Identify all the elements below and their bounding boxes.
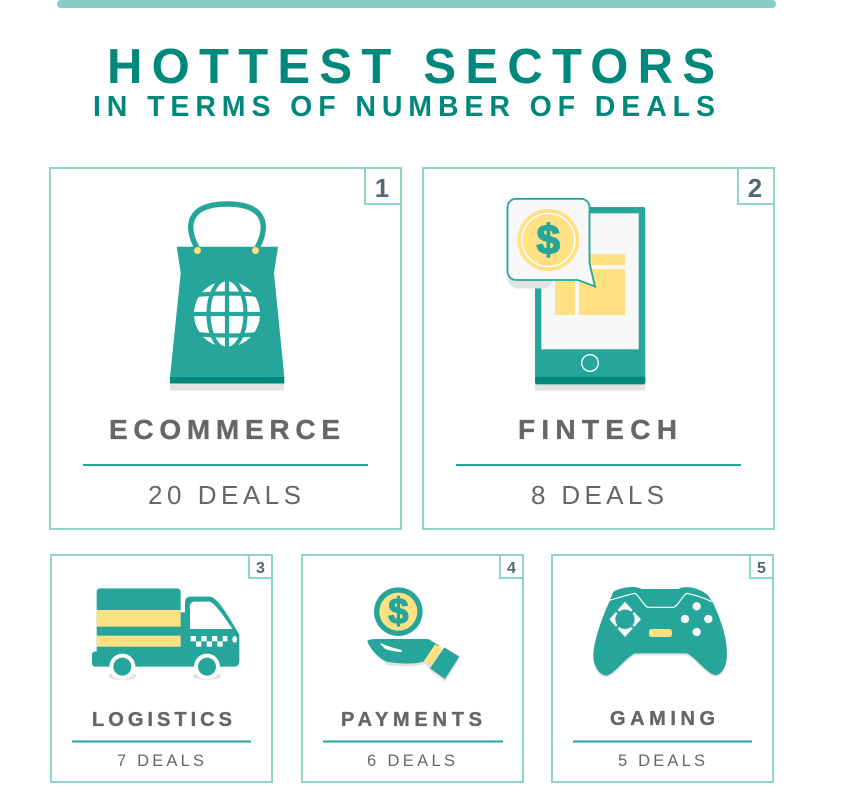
- icon: game controller: [593, 587, 727, 678]
- top bar: [57, 0, 776, 8]
- icon: shopping bag: [170, 204, 284, 390]
- icon: hand holding coin: $: [388, 590, 408, 631]
- label: payments: PAYMENTS: [341, 709, 482, 731]
- label: fintech: FINTECH: [518, 414, 677, 445]
- rank 3: 3: [256, 560, 265, 577]
- icon: delivery truck: [92, 588, 239, 680]
- panel: ecommerce: [50, 168, 401, 529]
- value: 8 deals: 8 DEALS: [531, 480, 664, 510]
- icon: phone with payment bubble: $: [537, 216, 560, 263]
- panel: fintech: [423, 168, 774, 529]
- value: 7 deals: 7 DEALS: [117, 752, 204, 770]
- icon: hand holding coin: [367, 587, 459, 682]
- rank 2: 2: [748, 173, 762, 203]
- subtitle: IN TERMS OF NUMBER OF DEALS: [93, 91, 715, 123]
- label: logistics: LOGISTICS: [92, 709, 232, 731]
- label: ecommerce: ECOMMERCE: [109, 414, 340, 445]
- rank 4: 4: [507, 560, 516, 577]
- value: 20 deals: 20 DEALS: [148, 480, 301, 510]
- panel: payments: [302, 555, 523, 782]
- label: gaming: GAMING: [610, 708, 715, 730]
- icon: phone with payment bubble: [508, 199, 645, 390]
- panel: logistics: [51, 555, 272, 782]
- rank 5: 5: [757, 560, 766, 577]
- panel: gaming: [552, 555, 773, 782]
- value: 5 deals: 5 DEALS: [618, 752, 705, 770]
- title: HOTTEST SECTORS: [107, 40, 715, 94]
- rank 1: 1: [375, 173, 389, 203]
- value: 6 deals: 6 DEALS: [367, 752, 455, 770]
